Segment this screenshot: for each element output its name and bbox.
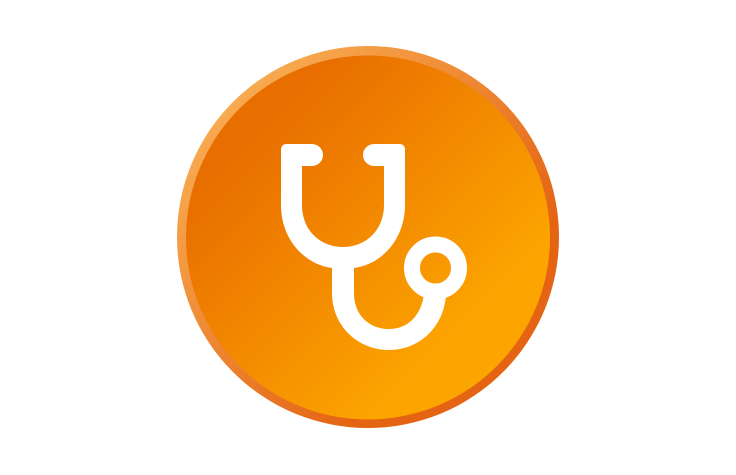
stethoscope chest piece [412,244,459,292]
stethoscope tubing [281,144,446,350]
icon: stethoscope [281,144,459,350]
inner disc [186,56,550,420]
icon: stethoscope badge [177,46,559,428]
outer ring [177,46,559,428]
